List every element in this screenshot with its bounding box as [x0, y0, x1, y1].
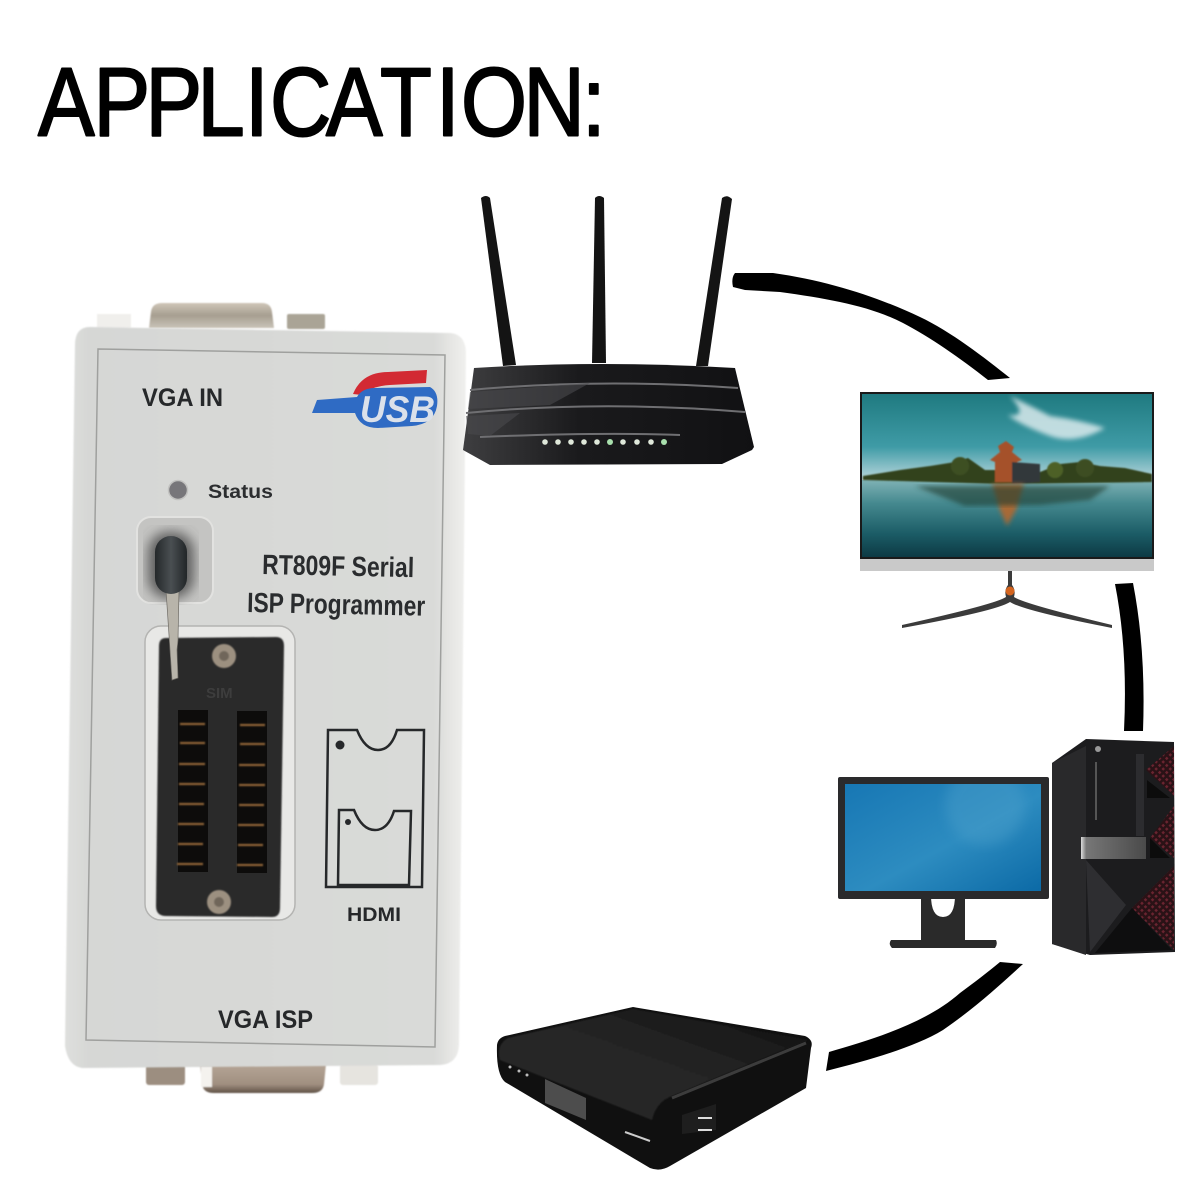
label: ISP Programmer: ISP Programmer	[247, 587, 426, 622]
connector: top VGA port	[97, 303, 325, 329]
icon: media box	[497, 1007, 812, 1170]
antennas	[481, 196, 732, 366]
panel: RT809F programmer device	[65, 303, 466, 1093]
label: Status: Status	[208, 481, 273, 503]
indicator: status LED	[168, 480, 188, 500]
tower case	[1052, 739, 1175, 955]
lever knob and pin	[155, 536, 187, 680]
screws	[207, 644, 236, 914]
diagram: chip outlines	[326, 730, 424, 887]
tower silver bay	[1081, 837, 1146, 859]
arrow: cable router to monitor	[732, 273, 1010, 380]
monitor chin	[860, 559, 1154, 571]
router body	[463, 364, 754, 465]
label: VGA IN: VGA IN	[142, 384, 223, 412]
title: APPLICATION:	[38, 49, 606, 157]
box front lights	[508, 1066, 528, 1076]
label: VGA ISP: VGA ISP	[218, 1006, 313, 1034]
icon: flat monitor	[860, 392, 1154, 628]
icon: router	[463, 196, 754, 465]
socket recess	[145, 626, 295, 920]
connector: bottom VGA port	[146, 1064, 378, 1093]
icon: USB logo: USB	[360, 389, 435, 430]
tower red panels	[1132, 746, 1174, 950]
box USB ports	[682, 1104, 716, 1134]
lever shadow	[148, 532, 194, 598]
status lights	[542, 439, 667, 445]
label: RT809F Serial: RT809F Serial	[262, 549, 414, 583]
lever recess	[137, 517, 213, 603]
pin slots	[177, 710, 267, 873]
arrow: cable monitor to tower	[1115, 583, 1144, 731]
arrow: cable tower to media box	[826, 962, 1023, 1071]
socket mark: SIM	[206, 685, 233, 702]
box edge highlight	[625, 1132, 650, 1141]
label: HDMI: HDMI	[347, 904, 401, 926]
icon: desktop computer	[838, 739, 1175, 955]
screen photo	[860, 392, 1154, 559]
device casing	[65, 327, 466, 1068]
desktop monitor stand	[890, 895, 997, 948]
ZIF socket	[156, 637, 284, 917]
icon: USB logo	[312, 370, 437, 430]
box display	[545, 1079, 586, 1120]
box top surface	[499, 1009, 808, 1120]
tower lower facets	[1086, 860, 1126, 952]
desktop monitor	[838, 765, 1049, 948]
monitor stand	[902, 571, 1112, 628]
